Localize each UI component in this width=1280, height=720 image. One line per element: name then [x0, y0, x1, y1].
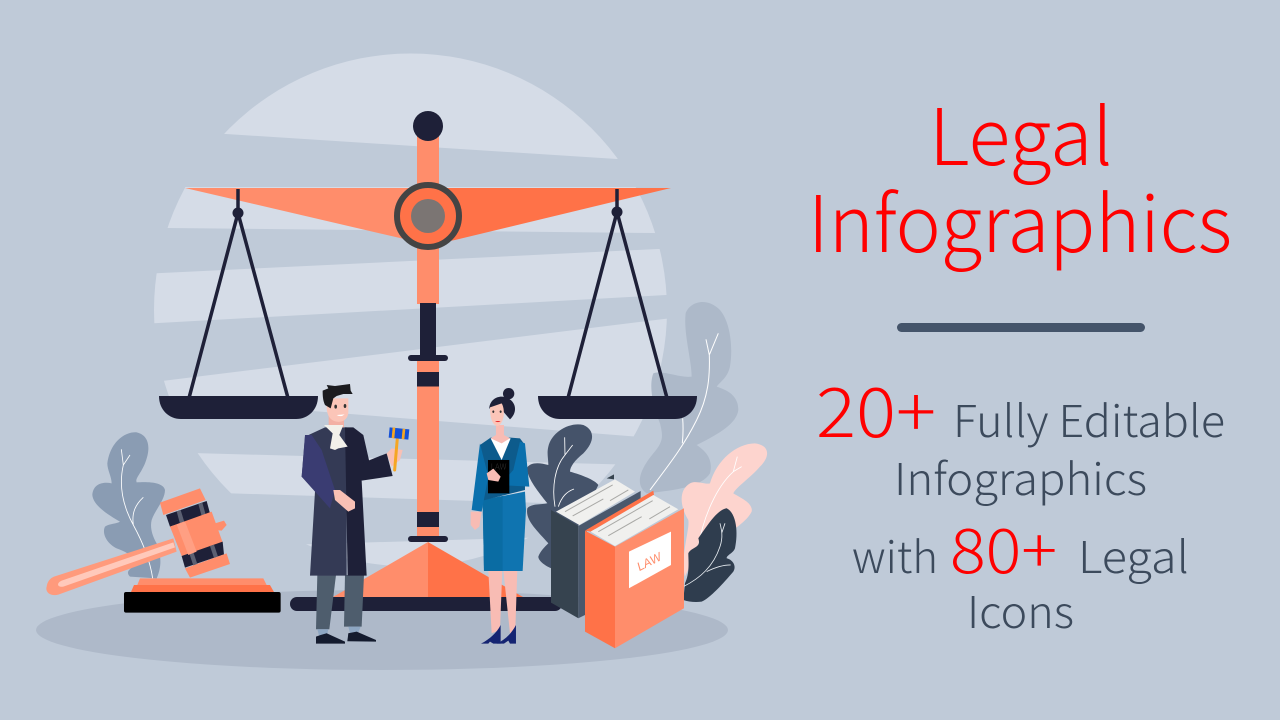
lawyer woman figure: LAW: [491, 461, 507, 472]
lawyer woman figure: [471, 388, 529, 644]
plant: blue-grey leaf by gavel: [92, 432, 165, 578]
law books: [551, 474, 684, 648]
subtitle text: Legal: [1078, 522, 1189, 586]
subtitle text: Icons: [967, 577, 1074, 641]
law books: LAW: [635, 549, 665, 574]
subtitle text: [816, 357, 1225, 641]
subtitle text: 80+: [950, 501, 1057, 591]
plant: pink leaf: [682, 443, 767, 577]
plant: large grey leaf: [640, 302, 738, 493]
plant: navy leaf behind books: [527, 424, 598, 570]
scale: left pan: [159, 189, 318, 419]
gavel and sounding block: [46, 488, 281, 613]
scale: beam with pivot: [185, 185, 671, 247]
subtitle text: Infographics: [894, 444, 1147, 508]
background striped circle: [140, 40, 680, 568]
scale: post and base: [290, 111, 562, 611]
scale: right pan: [538, 189, 697, 419]
plant: dark leaf: [683, 508, 737, 602]
title: Infographics: [808, 163, 1232, 275]
judge figure: [302, 384, 409, 644]
title: [808, 76, 1232, 275]
subtitle text: Fully Editable: [953, 386, 1225, 450]
title: Legal: [929, 76, 1113, 188]
subtitle text: with: [852, 522, 938, 586]
ground shadow: [36, 590, 728, 670]
subtitle text: 20+: [816, 357, 936, 457]
divider bar: [897, 323, 1145, 332]
